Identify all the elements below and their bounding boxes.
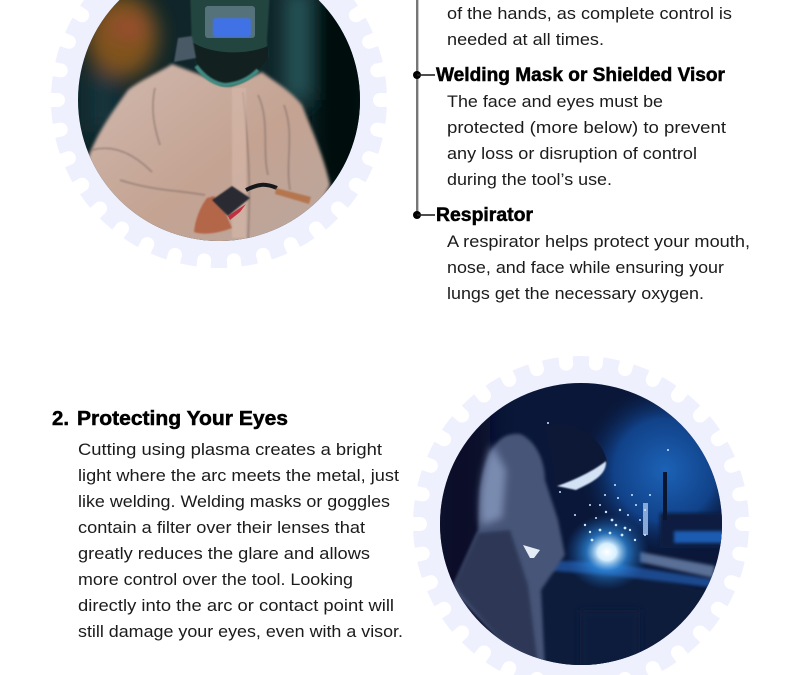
helmet <box>190 0 270 86</box>
text block: welding mask description: The face and eyes must be <box>447 92 663 111</box>
photo: welder cutting metal with blue sparks <box>440 383 722 665</box>
text block: respirator description: nose, and face while ensuring your <box>447 258 724 277</box>
text block: hands continued <box>447 4 732 49</box>
icon: gear behind welder photo <box>47 0 391 272</box>
heading: respirator: Respirator <box>436 205 534 226</box>
text block: welding mask description <box>447 92 726 189</box>
text block: protecting your eyes description: still damage your eyes, even with a visor. <box>78 622 403 641</box>
timeline connector with bullet points <box>413 0 435 219</box>
text block: protecting your eyes description: light where the arc meets the metal, just <box>78 466 399 485</box>
text block: welding mask description: protected (more below) to prevent <box>447 118 726 137</box>
text block: protecting your eyes description: contain a filter over their lenses that <box>78 518 365 537</box>
text block: hands continued: needed at all times. <box>447 30 604 49</box>
text block: respirator description: A respirator helps protect your mouth, <box>447 232 750 251</box>
text block: protecting your eyes description: greatly reduces the glare and allows <box>78 544 370 563</box>
heading: welding mask or shielded visor: Welding Mask or Shielded Visor <box>436 65 726 86</box>
text block: protecting your eyes description: directly into the arc or contact point will <box>78 596 394 615</box>
torch and hand <box>194 196 232 234</box>
text block: protecting your eyes description: Cutting using plasma creates a bright <box>78 440 382 459</box>
text block: protecting your eyes description: more control over the tool. Looking <box>78 570 353 589</box>
text block: hands continued: of the hands, as complete control is <box>447 4 732 23</box>
text block: respirator description: lungs get the necessary oxygen. <box>447 284 704 303</box>
text block: respirator description <box>447 232 750 303</box>
text block: protecting your eyes description <box>78 440 403 641</box>
text block: welding mask description: during the tool’s use. <box>447 170 612 189</box>
photo: welder in stained coat holding torch <box>70 0 372 248</box>
text block: welding mask description: any loss or disruption of control <box>447 144 697 163</box>
heading: 2. protecting your eyes: Protecting Your Eyes <box>77 408 288 430</box>
sparks <box>565 514 649 590</box>
icon: gear behind plasma cutting photo <box>409 352 753 675</box>
heading: 2. protecting your eyes: 2. <box>52 408 69 430</box>
coat <box>88 64 330 248</box>
table and machinery <box>539 590 706 665</box>
text block: protecting your eyes description: like welding. Welding masks or goggles <box>78 492 390 511</box>
figure <box>452 434 565 670</box>
